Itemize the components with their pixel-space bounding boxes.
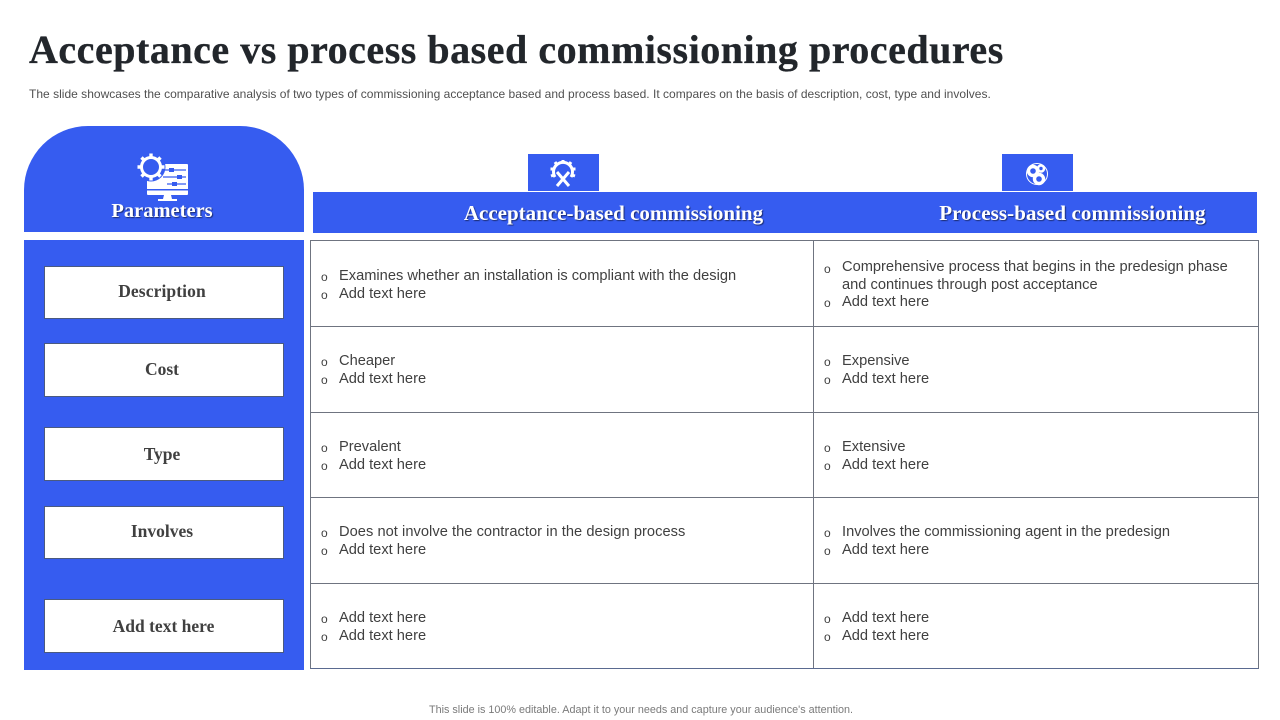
label: cost xyxy=(44,343,284,397)
panel: parameters header xyxy=(24,126,304,232)
label: description: Description xyxy=(118,281,206,301)
row 2 left text xyxy=(321,353,426,387)
row 3 left text: Prevalent xyxy=(339,439,401,455)
row 5 right text xyxy=(824,610,929,644)
footer note: This slide is 100% editable. Adapt it to your needs and capture your audience's attention. xyxy=(429,704,853,716)
row 5 left text xyxy=(321,610,426,644)
row 4 left text: o xyxy=(321,526,328,540)
label: description xyxy=(44,266,284,319)
heading: process-based commissioning: Process-based commissioning xyxy=(939,201,1206,225)
row 3 right text: Extensive xyxy=(842,439,905,455)
panel: column header band xyxy=(313,192,1257,233)
row 3 right text xyxy=(824,439,929,473)
heading: acceptance-based commissioning: Acceptance-based commissioning xyxy=(464,201,763,225)
row 4 right text: Involves the commissioning agent in the predesign xyxy=(842,524,1170,540)
row 5 right text: o xyxy=(824,630,831,644)
label: add text here xyxy=(44,599,284,653)
title: Acceptance vs process based commissioning procedures xyxy=(29,27,1004,72)
row 5 right text: Add text here xyxy=(842,610,929,626)
subtitle: The slide showcases the comparative analysis of two types of commissioning acceptance based and process based. It compares on the basis of description, cost, type and involves. xyxy=(29,87,991,101)
label: involves: Involves xyxy=(131,521,193,541)
panel: parameter list xyxy=(24,240,304,670)
row 1 right text: and continues through post acceptance xyxy=(842,277,1098,293)
row 1 right text xyxy=(824,259,1228,310)
row 3 left text: o xyxy=(321,459,328,473)
icon: gear and tools xyxy=(528,154,599,191)
icon: gears cycle xyxy=(1002,154,1073,191)
row 4 right text: o xyxy=(824,526,831,540)
row 3 left text: o xyxy=(321,441,328,455)
row 2 right text: Add text here xyxy=(842,371,929,387)
row 1 left text: Add text here xyxy=(339,286,426,302)
label: cost: Cost xyxy=(145,358,179,378)
row 3 right text: o xyxy=(824,459,831,473)
row 4 right text: o xyxy=(824,544,831,558)
row 4 left text: Add text here xyxy=(339,542,426,558)
row 4 right text xyxy=(824,524,1170,558)
row 1 left text xyxy=(321,268,736,302)
row 5 left text: Add text here xyxy=(339,628,426,644)
row 2 left text: o xyxy=(321,355,328,369)
row 1 right text: o xyxy=(824,296,831,310)
row 3 right text: Add text here xyxy=(842,457,929,473)
row 1 right text: Comprehensive process that begins in the predesign phase xyxy=(842,259,1228,275)
row 5 right text: o xyxy=(824,612,831,626)
row 3 left text: Add text here xyxy=(339,457,426,473)
label: type: Type xyxy=(144,444,180,464)
row 4 left text: o xyxy=(321,544,328,558)
row 2 left text: o xyxy=(321,373,328,387)
row 1 right text: o xyxy=(824,262,831,276)
row 1 right text: Add text here xyxy=(842,294,929,310)
row 1 left text: o xyxy=(321,288,328,302)
row 2 right text: o xyxy=(824,355,831,369)
row 5 right text: Add text here xyxy=(842,628,929,644)
label: add text here: Add text here xyxy=(113,616,214,636)
row 4 left text xyxy=(321,524,685,558)
row 4 right text: Add text here xyxy=(842,542,929,558)
row 5 left text: o xyxy=(321,630,328,644)
heading: parameters: Parameters xyxy=(111,200,213,222)
row 2 right text xyxy=(824,353,929,387)
row 2 left text: Add text here xyxy=(339,371,426,387)
row 1 left text: o xyxy=(321,270,328,284)
row 5 left text: o xyxy=(321,612,328,626)
row 3 left text xyxy=(321,439,426,473)
icon: monitor with gear xyxy=(138,154,188,201)
row 2 right text: o xyxy=(824,373,831,387)
row 4 left text: Does not involve the contractor in the design process xyxy=(339,524,685,540)
row 2 right text: Expensive xyxy=(842,353,910,369)
row 5 left text: Add text here xyxy=(339,610,426,626)
comparison table xyxy=(310,240,1259,669)
label: involves xyxy=(44,506,284,559)
row 3 right text: o xyxy=(824,441,831,455)
row 2 left text: Cheaper xyxy=(339,353,395,369)
label: type xyxy=(44,427,284,481)
row 1 left text: Examines whether an installation is compliant with the design xyxy=(339,268,736,284)
